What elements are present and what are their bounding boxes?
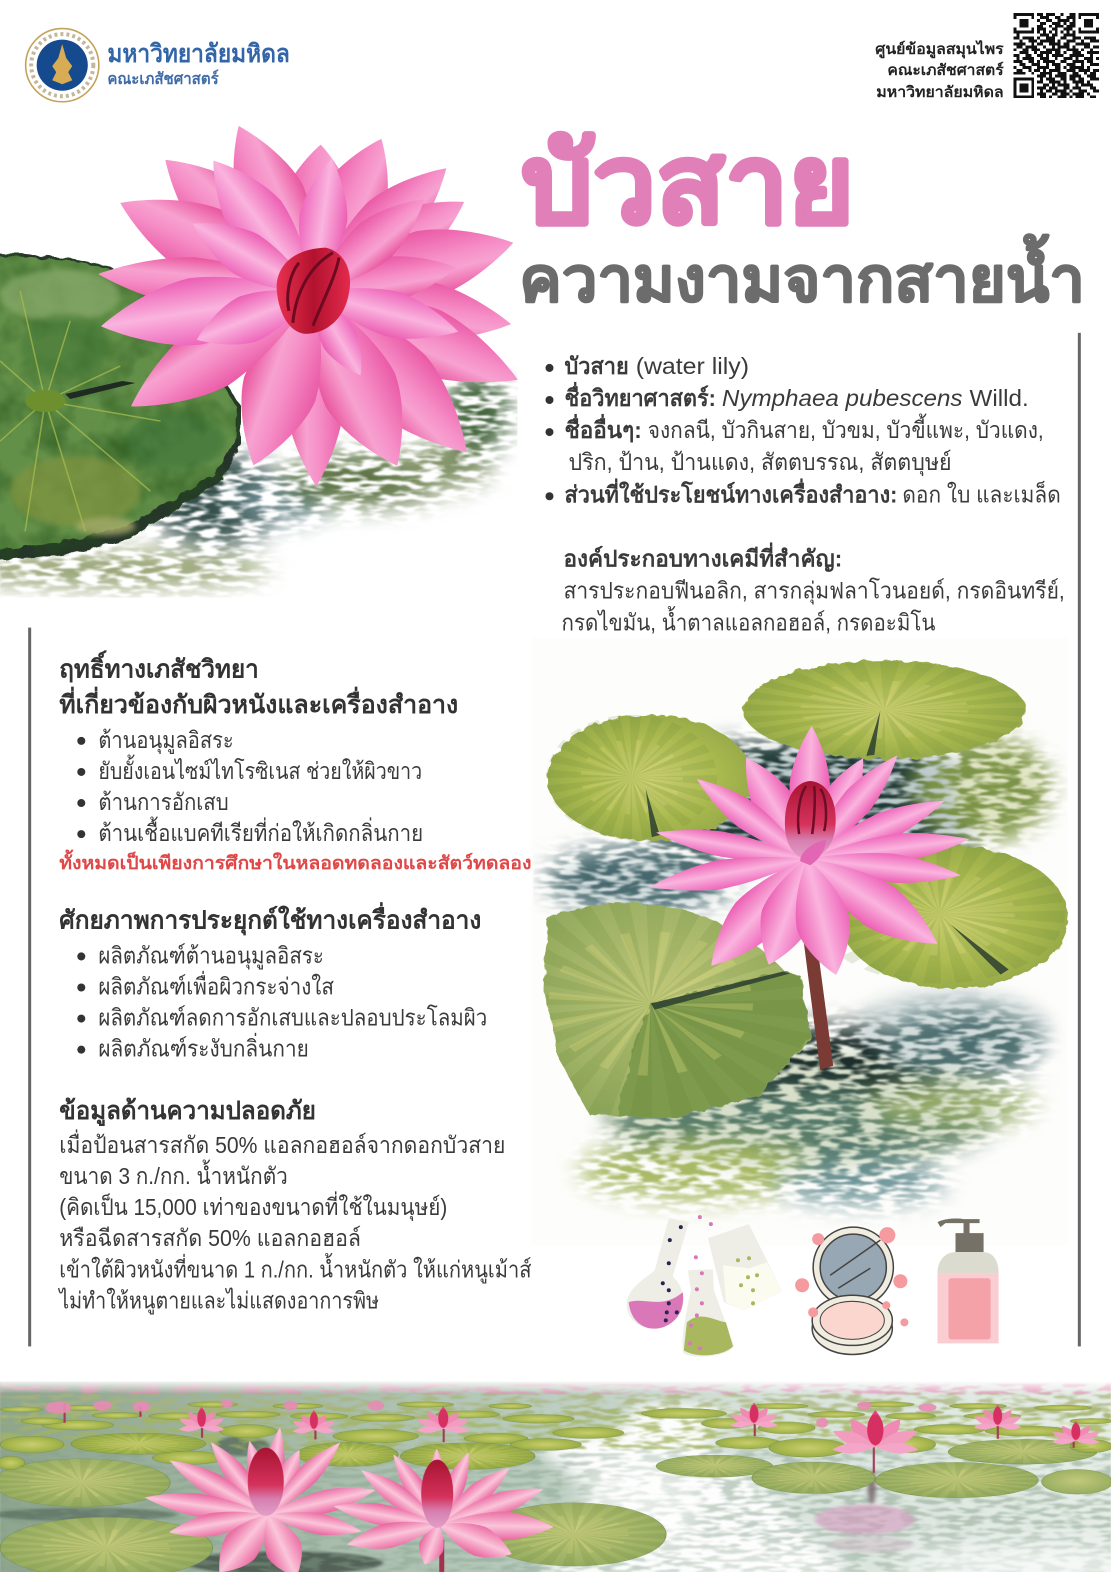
text block: plant identity: Willd. xyxy=(970,385,1029,411)
text block: plant identity: (water lily) xyxy=(636,353,749,379)
header credit text xyxy=(875,39,1005,101)
text block: pharmacological activity: ต้านการอักเสบ xyxy=(98,789,229,815)
text block: safety data: เข้าใต้ผิวหนังที่ขนาด 1 ก./กก. น้ำหนักตัว ให้แก่หนูเม้าส์ xyxy=(59,1252,531,1283)
text block: plant identity: ส่วนที่ใช้ประโยชน์ทางเครื่องสำอาง: xyxy=(565,477,897,507)
text block: cosmetic application potential: ผลิตภัณฑ์ระงับกลิ่นกาย xyxy=(98,1033,309,1062)
text block: key chemical constituents xyxy=(562,541,1065,636)
text block: cosmetic application potential: ผลิตภัณฑ์เพื่อผิวกระจ่างใส xyxy=(98,971,334,1000)
text block: safety data: ไม่ทำให้หนูตายและไม่แสดงอาการพิษ xyxy=(58,1287,379,1314)
text block: pharmacological activity: ที่เกี่ยวข้องกับผิวหนังและเครื่องสำอาง xyxy=(59,686,458,719)
logo: Mahidol University seal and name xyxy=(26,29,290,102)
text block: pharmacological activity: ต้านอนุมูลอิสระ xyxy=(98,727,234,754)
icon: compact powder mirror xyxy=(795,1227,908,1354)
text block: pharmacological activity: ยับยั้งเอนไซม์ไทโรซิเนส ช่วยให้ผิวขาว xyxy=(98,754,422,784)
text block: plant identity: จงกลนี, บัวกินสาย, บัวขม, บัวขี้แพะ, บัวแดง, xyxy=(648,413,1044,443)
text block: safety data: (คิดเป็น 15,000 เท่าของขนาดที่ใช้ในมนุษย์) xyxy=(59,1191,447,1221)
illustration: second water lily with pads xyxy=(531,638,1068,1245)
text block: key chemical constituents: องค์ประกอบทางเคมีที่สำคัญ: xyxy=(564,541,842,572)
lilies in the foreground xyxy=(143,1426,554,1572)
logo: Mahidol University seal and name: มหาวิทยาลัยมหิดล xyxy=(107,40,290,68)
text block: pharmacological activity: ฤทธิ์ทางเภสัชวิทยา xyxy=(59,650,259,684)
icon: pump lotion bottle xyxy=(937,1219,999,1343)
text block: cosmetic application potential: ผลิตภัณฑ์ลดการอักเสบและปลอบประโลมผิว xyxy=(98,1005,487,1031)
icon: laboratory flasks xyxy=(627,1215,782,1357)
text block: cosmetic application potential xyxy=(59,901,487,1062)
illustration: lily pond panorama xyxy=(0,1380,1111,1572)
text block: plant identity: ชื่อวิทยาศาสตร์: xyxy=(565,381,716,411)
title: บัวสาย xyxy=(521,124,854,247)
subtitle: ความงามจากสายน้ำ xyxy=(519,234,1085,315)
text block: plant identity: ชื่ออื่นๆ: xyxy=(565,413,642,443)
text block: cosmetic application potential: ศักยภาพการประยุกต์ใช้ทางเครื่องสำอาง xyxy=(59,901,481,936)
text block: key chemical constituents: กรดไขมัน, น้ำตาลแอลกอฮอล์, กรดอะมิโน xyxy=(562,606,936,636)
text block: plant identity xyxy=(545,353,1061,507)
text block: plant identity: Nymphaea pubescens xyxy=(722,385,963,411)
text block: safety data: หรือฉีดสารสกัด 50% แอลกอฮอล์ xyxy=(59,1225,361,1251)
text block: pharmacological activity: ต้านเชื้อแบคทีเรียที่ก่อให้เกิดกลิ่นกาย xyxy=(98,816,423,846)
text block: pharmacological activity xyxy=(59,650,458,846)
left vertical rule xyxy=(28,628,31,1346)
right vertical rule xyxy=(1078,333,1081,1346)
text block: safety data: ข้อมูลด้านความปลอดภัย xyxy=(59,1097,316,1127)
illustration: top water lily on green leaf xyxy=(0,112,531,587)
text block: key chemical constituents: สารประกอบฟีนอลิก, สารกลุ่มฟลาโวนอยด์, กรดอินทรีย์, xyxy=(564,578,1065,605)
text block: safety data: เมื่อป้อนสารสกัด 50% แอลกอฮอล์จากดอกบัวสาย xyxy=(59,1129,505,1158)
header credit text: ศูนย์ข้อมูลสมุนไพร xyxy=(875,39,1005,59)
red caveat note: ทั้งหมดเป็นเพียงการศึกษาในหลอดทดลองและสัตว์ทดลอง xyxy=(59,849,531,873)
text block: safety data xyxy=(58,1097,531,1314)
header credit text: มหาวิทยาลัยมหิดล xyxy=(876,83,1004,101)
text block: cosmetic application potential: ผลิตภัณฑ์ต้านอนุมูลอิสระ xyxy=(98,942,324,969)
header credit text: คณะเภสัชศาสตร์ xyxy=(887,61,1005,79)
QR code xyxy=(1014,13,1099,98)
logo: Mahidol University seal and name: คณะเภสัชศาสตร์ xyxy=(107,69,219,88)
text block: safety data: ขนาด 3 ก./กก. น้ำหนักตัว xyxy=(59,1159,288,1189)
text block: plant identity: ดอก ใบ และเมล็ด xyxy=(902,479,1061,507)
text block: plant identity: บัวสาย xyxy=(565,353,629,379)
text block: plant identity: ปริก, ป้าน, ป้านแดง, สัตตบรรณ, สัตตบุษย์ xyxy=(569,449,952,476)
